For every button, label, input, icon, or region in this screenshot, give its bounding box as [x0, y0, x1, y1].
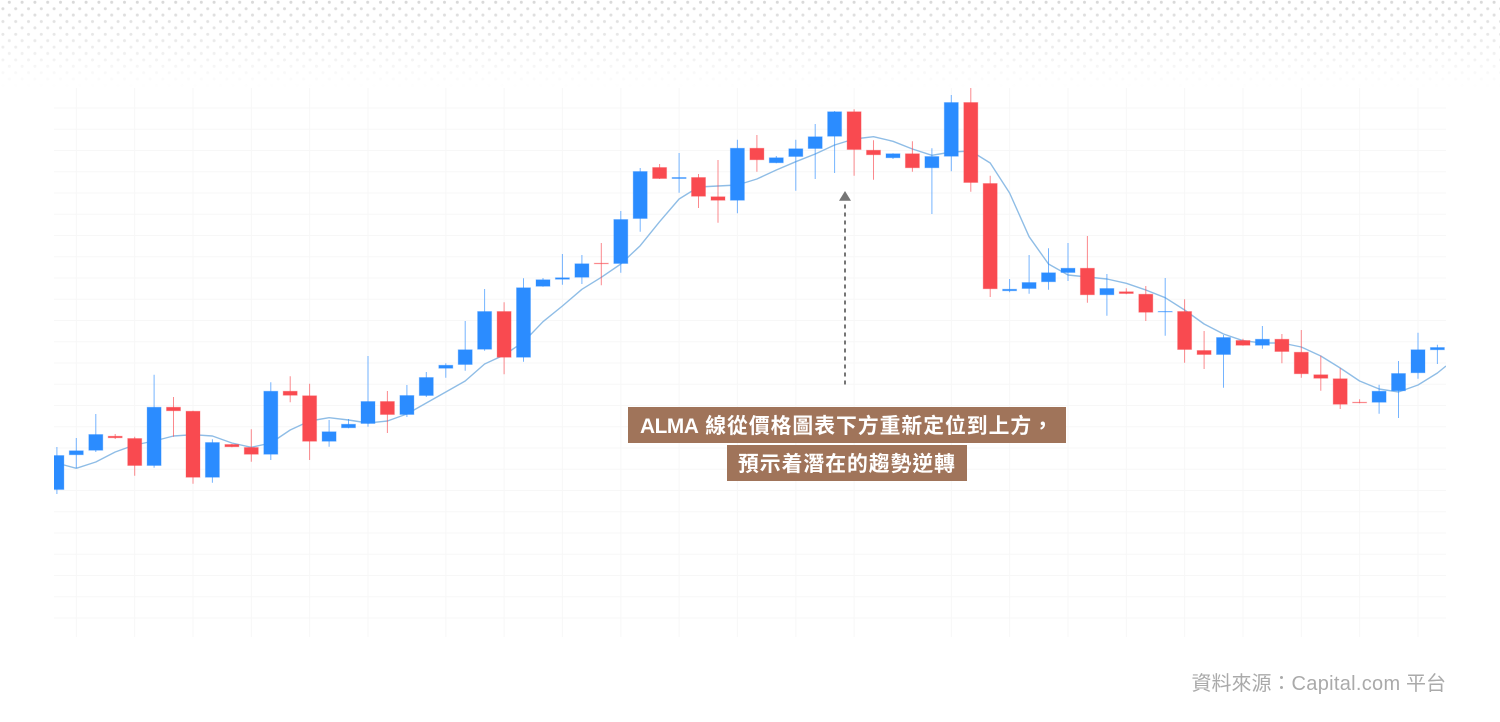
source note: 資料來源：Capital.com 平台	[1192, 673, 1446, 695]
callout: ALMA line 2: 預示着潛在的趨勢逆轉	[738, 453, 956, 476]
ALMA line	[54, 137, 1446, 468]
background dot pattern	[2, 0, 1500, 68]
callout: ALMA line 1	[628, 407, 1066, 443]
red candlesticks	[108, 88, 1367, 484]
callout: ALMA line 1: ALMA 線從價格圖表下方重新定位到上方，	[640, 415, 1054, 438]
arrow: dashed pointer	[839, 191, 851, 388]
callout: ALMA line 2	[727, 445, 967, 481]
blue candlesticks	[50, 95, 1444, 494]
candlestick chart	[54, 88, 1446, 494]
